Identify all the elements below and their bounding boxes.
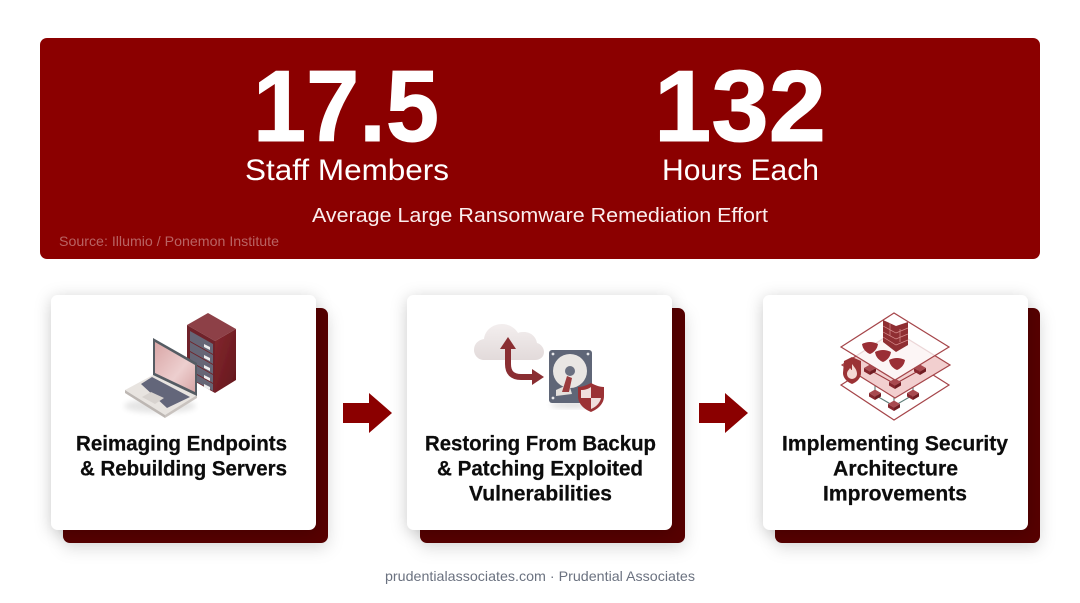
- panel: step 3 card: [763, 295, 1040, 543]
- title: step 2: [425, 432, 656, 506]
- subtitle: Average Large Ransomware Remediation Effort: [312, 205, 768, 227]
- title: step 1: Reimaging Endpoints: [76, 432, 287, 456]
- title: step 3: [782, 432, 1008, 506]
- title: step 2: & Patching Exploited: [437, 458, 643, 480]
- stat: 17.5: 17.5: [253, 51, 439, 163]
- panel: statistics banner: [40, 38, 1040, 259]
- arrow: step 1 to step 2: [343, 393, 392, 433]
- source note: Source: Illumio / Ponemon Institute: [59, 233, 279, 249]
- title: step 3: Implementing Security: [782, 432, 1008, 456]
- arrow: step 2 to step 3: [699, 393, 748, 433]
- title: step 2: Vulnerabilities: [469, 482, 612, 506]
- title: step 2: Restoring From Backup: [425, 432, 656, 456]
- icon: cloud backup to disk: [474, 324, 604, 412]
- title: step 1: & Rebuilding Servers: [80, 458, 287, 480]
- label: staff members: Staff Members: [245, 154, 449, 187]
- title: step 3: Improvements: [823, 482, 967, 506]
- panel: step 1 card: [51, 295, 328, 543]
- label: hours each: Hours Each: [662, 154, 819, 187]
- panel: step 2 card: [407, 295, 685, 543]
- title: step 1: [76, 432, 287, 480]
- stat: 132: 132: [654, 51, 826, 163]
- icon: laptop and server: [124, 313, 236, 418]
- title: step 3: Architecture: [833, 458, 958, 480]
- icon: layered security architecture: [841, 313, 950, 420]
- footer credit: prudentialassociates.com · Prudential Associates: [385, 568, 695, 584]
